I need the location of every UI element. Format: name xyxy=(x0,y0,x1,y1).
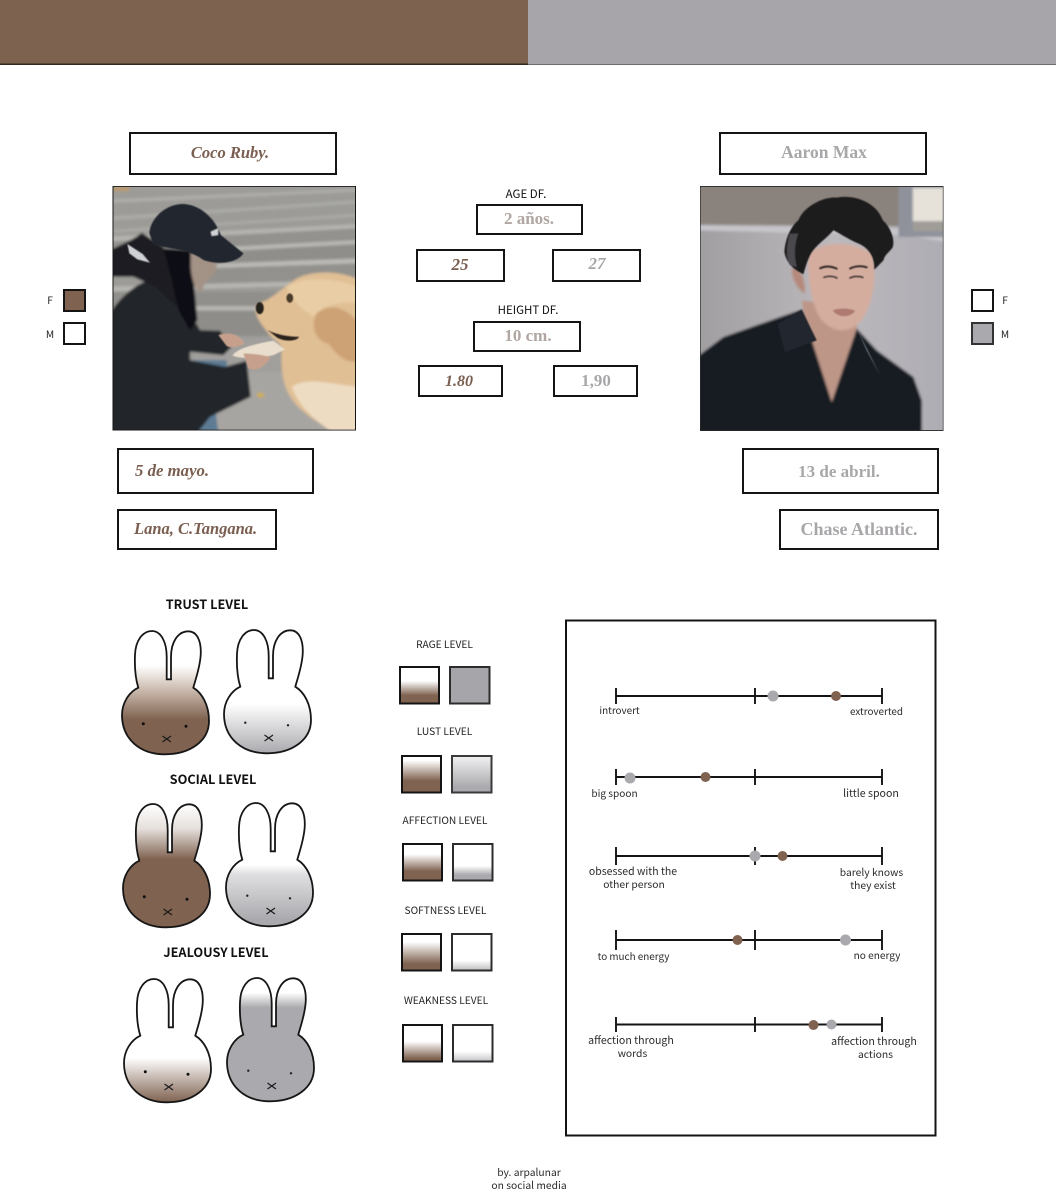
lust level xyxy=(402,723,492,792)
scale: big spoon to little spoon: big spoon xyxy=(591,785,638,800)
scale: obsessed to barely knows: obsessed with the xyxy=(589,864,677,879)
scale: introvert to extroverted xyxy=(599,688,903,718)
music box xyxy=(118,510,276,549)
rage level xyxy=(400,636,490,704)
age difference box: 2 años. xyxy=(504,209,554,228)
birthday box xyxy=(118,449,313,493)
photo: woman in cap with golden retriever on steps xyxy=(112,186,356,430)
gender key: Aaron xyxy=(972,290,1009,344)
softness level xyxy=(402,902,492,970)
heading: trust level: TRUST LEVEL xyxy=(166,594,248,613)
credit xyxy=(491,1164,567,1192)
credit: on social media xyxy=(491,1177,567,1192)
age heading: AGE DF. xyxy=(506,186,546,202)
bunny: trust Coco xyxy=(122,631,209,754)
scale: obsessed to barely knows: other person xyxy=(603,876,665,891)
scale: too much energy to no energy xyxy=(598,930,901,963)
birthday box xyxy=(743,449,938,493)
bunny: social Aaron xyxy=(226,803,313,926)
name box: Aaron Max: Aaron Max xyxy=(781,142,867,162)
age box: Aaron: 27 xyxy=(588,254,607,273)
scale: affection through words to actions: words xyxy=(618,1045,647,1060)
photo: man with dark hair and black shirt xyxy=(700,186,944,431)
rage level: RAGE LEVEL xyxy=(416,636,473,651)
bunny: social Coco xyxy=(123,804,210,927)
height heading: HEIGHT DF. xyxy=(498,302,558,318)
height difference box: 10 cm. xyxy=(504,326,552,345)
weakness level xyxy=(403,992,492,1062)
scale: affection through words to actions: affection through xyxy=(831,1034,917,1049)
height box: Aaron: 1,90 xyxy=(581,371,611,390)
gender key: Aaron: M xyxy=(1001,326,1009,341)
panel: personality scales xyxy=(566,620,936,1136)
bunny: jealousy Aaron xyxy=(227,978,314,1101)
scale: affection through words to actions: affection through xyxy=(588,1033,674,1048)
height box: Aaron xyxy=(554,366,637,396)
bunny: trust Aaron xyxy=(224,630,311,753)
age difference box xyxy=(477,205,582,234)
scale: obsessed to barely knows xyxy=(589,847,903,892)
panel: Aaron profile xyxy=(697,133,947,549)
height box: Coco xyxy=(419,366,502,396)
softness level: SOFTNESS LEVEL xyxy=(405,902,487,917)
scale: too much energy to no energy: no energy xyxy=(854,947,901,962)
age box: Coco xyxy=(417,250,504,281)
name box: Coco Ruby: Coco Ruby. xyxy=(191,143,269,162)
height difference box xyxy=(474,322,580,351)
heading: jealousy level: JEALOUSY LEVEL xyxy=(163,942,269,961)
scale: too much energy to no energy: to much energy xyxy=(598,949,669,963)
scale: affection through words to actions xyxy=(588,1017,917,1061)
scale: introvert to extroverted: introvert xyxy=(599,703,640,717)
affection level: AFFECTION LEVEL xyxy=(403,812,488,827)
gender key: Aaron: F xyxy=(1002,292,1008,307)
age box: Coco: 25 xyxy=(450,255,469,274)
music box: Chase Atlantic. xyxy=(800,519,918,539)
gender key: Coco: M xyxy=(46,326,54,341)
gender key: Coco: F xyxy=(47,292,53,307)
birthday box: 5 de mayo. xyxy=(135,461,209,480)
lust level: LUST LEVEL xyxy=(417,723,473,738)
scale: affection through words to actions: actions xyxy=(858,1046,893,1061)
birthday box: 13 de abril. xyxy=(798,462,880,481)
height box: Coco: 1.80 xyxy=(445,373,473,390)
scale: obsessed to barely knows: barely knows xyxy=(840,864,903,879)
heading: social level: SOCIAL LEVEL xyxy=(170,769,256,788)
music box xyxy=(780,510,938,549)
scale: obsessed to barely knows: they exist xyxy=(850,877,896,892)
weakness level: WEAKNESS LEVEL xyxy=(404,992,489,1007)
header colour bands xyxy=(0,0,1056,65)
panel: Coco profile xyxy=(107,133,364,549)
scale: big spoon to little spoon: little spoon xyxy=(843,786,899,801)
affection level xyxy=(403,812,492,880)
name box: Coco Ruby xyxy=(130,133,336,174)
gender key: Coco xyxy=(46,290,85,344)
panel: gradient level squares xyxy=(400,636,492,1062)
panel: bunny levels xyxy=(122,594,314,1102)
bunny: jealousy Coco xyxy=(124,979,211,1102)
age box: Aaron xyxy=(553,250,640,281)
music box: Lana, C.Tangana. xyxy=(133,519,257,538)
name box: Aaron Max xyxy=(720,133,926,174)
panel: age and height differences xyxy=(417,186,640,396)
scale: big spoon to little spoon xyxy=(591,769,899,801)
scale: introvert to extroverted: extroverted xyxy=(850,704,903,718)
credit: by. arpalunar xyxy=(497,1164,562,1179)
